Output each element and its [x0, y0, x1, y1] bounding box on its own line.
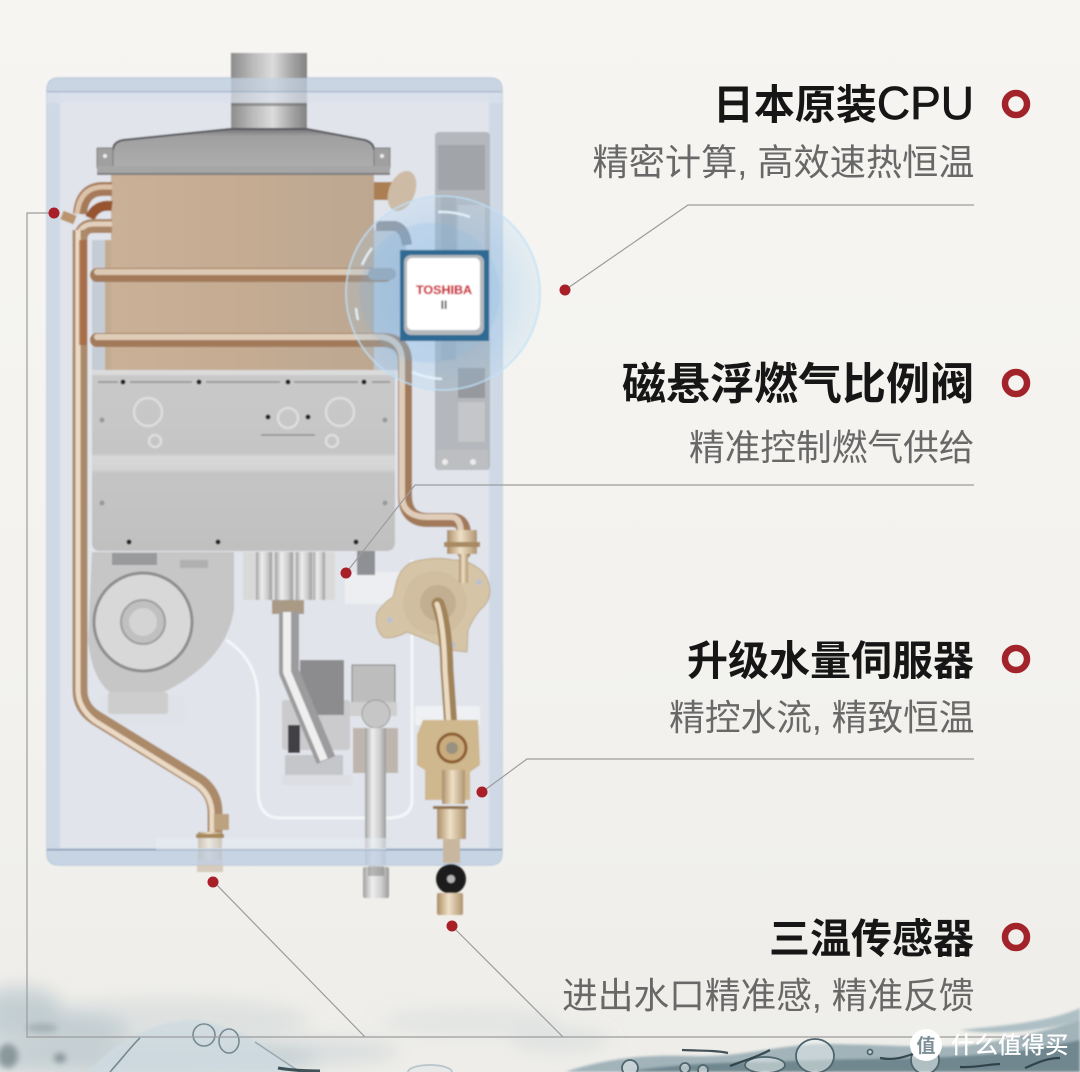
silver inlet pipe bottom	[363, 728, 389, 898]
gas inlet silver pipe	[287, 612, 326, 760]
burner manifold	[243, 552, 335, 614]
description: 精准控制燃气供给	[689, 428, 974, 468]
water heater illustration	[47, 53, 541, 915]
watermark icon: 值	[916, 1035, 936, 1057]
horizontal copper coil pipes	[97, 272, 390, 275]
copper return pipes left	[62, 187, 112, 242]
leader lines	[27, 205, 1040, 1037]
exchanger side strips	[92, 240, 111, 370]
description: 精控水流, 精致恒温	[669, 698, 974, 738]
description: 进出水口精准感, 精准反馈	[562, 976, 974, 1016]
left dark smudges	[0, 1023, 66, 1068]
feature: water servo	[669, 638, 1027, 738]
heading: 磁悬浮燃气比例阀	[622, 360, 974, 409]
exchanger hood	[97, 129, 390, 175]
main copper pipe right	[97, 337, 464, 552]
fog	[0, 987, 610, 1072]
lower copper hose	[437, 604, 452, 742]
exchanger right side shroud	[374, 230, 406, 370]
ring marker	[1005, 648, 1027, 670]
black drain knob	[436, 864, 466, 915]
brass servo valve	[376, 530, 490, 652]
casing top band	[47, 78, 502, 103]
gas box	[92, 370, 395, 551]
control circuit board	[435, 132, 490, 470]
feature: gas valve	[622, 360, 1027, 468]
small grey bracket	[357, 551, 375, 575]
watermark text: 什么值得买	[951, 1032, 1068, 1058]
gas valve assembly	[282, 660, 398, 785]
dark wave strokes	[278, 1048, 1060, 1071]
watermark	[910, 1029, 1068, 1061]
heading: 日本原装CPU	[713, 77, 974, 129]
casing bottom band	[47, 838, 502, 865]
left splash dome	[88, 1020, 300, 1072]
heading: 升级水量伺服器	[687, 638, 974, 684]
flue pipe	[231, 53, 307, 131]
feature: temperature sensors	[562, 916, 1027, 1016]
chip brand: TOSHIBA	[416, 283, 472, 297]
feature: CPU	[593, 77, 1027, 183]
watermark icon	[910, 1029, 942, 1061]
heat exchanger body	[111, 174, 374, 370]
brass water valve	[417, 720, 480, 863]
red marker dots	[48, 208, 570, 932]
cpu glow halo	[345, 195, 541, 391]
ring marker	[1005, 926, 1027, 948]
ring marker	[1005, 93, 1027, 115]
bubbles	[110, 1024, 300, 1072]
chip mark: II	[441, 298, 447, 312]
main copper pipe left	[78, 230, 215, 838]
heading: 三温传感器	[769, 916, 974, 962]
dark water band right	[565, 1008, 1080, 1072]
water splash at page bottom	[0, 987, 1080, 1072]
outlet fitting left	[196, 814, 229, 872]
fan housing	[88, 552, 234, 714]
transparent casing	[47, 78, 502, 865]
ring marker	[1005, 372, 1027, 394]
toshiba chip	[400, 250, 489, 341]
description: 精密计算, 高效速热恒温	[593, 142, 974, 183]
right upper fitting	[374, 167, 422, 245]
